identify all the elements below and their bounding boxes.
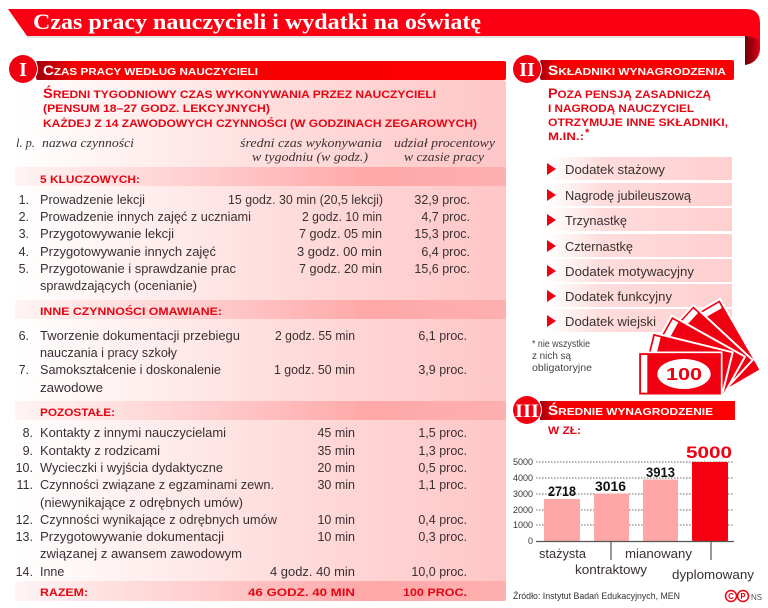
band: 5 kluczowych <box>15 167 506 186</box>
rows 8-14: 35 min <box>317 444 355 458</box>
rows 1-5: 4. <box>19 245 29 259</box>
rows 8-14: Przygotowywanie dokumentacji <box>40 530 224 544</box>
title: Czas pracy nauczycieli i wydatki na oświatę <box>33 9 481 34</box>
rows 8-14: 1,1 proc. <box>418 478 467 492</box>
bar chart: average salary: 4000 <box>513 473 533 483</box>
rows 1-5: 15,3 proc. <box>414 227 470 241</box>
table column headers: nazwa czynności <box>42 136 135 150</box>
rows 1-5: 32,9 proc. <box>414 193 470 207</box>
list of pay components: Dodatek wiejski <box>565 315 656 329</box>
rows 6-7: 3,9 proc. <box>418 363 467 377</box>
rows 8-14: 12. <box>16 513 33 527</box>
section header I: CZAS PRACY WEDŁUG NAUCZYCIELI <box>43 63 258 78</box>
credit icons: P <box>740 592 746 601</box>
subheading II: M.IN.: <box>548 131 584 143</box>
rows 6-7: 6. <box>19 329 29 343</box>
band: inne czynności omawiane <box>15 300 506 319</box>
rows 6-7: zawodowe <box>40 381 103 395</box>
table column headers: w czasie pracy <box>404 150 484 164</box>
table column headers <box>16 136 495 164</box>
rows 1-5: 3 godz. 00 min <box>297 245 382 259</box>
bar chart: average salary: 3913 <box>646 465 675 480</box>
rows 1-5: Przygotowanie i sprawdzanie prac <box>40 262 236 276</box>
panel subheading: KAŻDEJ Z 14 ZAWODOWYCH CZYNNOŚCI (W GODZINACH ZEGAROWYCH) <box>43 117 477 130</box>
rows 8-14: 8. <box>23 426 33 440</box>
rows 1-5: sprawdzających (ocenianie) <box>40 279 197 293</box>
list of pay components: Dodatek motywacyjny <box>565 265 695 279</box>
rows 6-7 <box>19 329 467 395</box>
band: razem: RAZEM: <box>40 587 88 599</box>
chart unit label: W ZŁ: <box>548 425 581 437</box>
band: razem: 100 PROC. <box>403 587 467 599</box>
panel subheading: (PENSUM 18–27 GODZ. LEKCYJNYCH) <box>43 103 270 115</box>
bar chart: average salary: kontraktowy <box>575 563 648 577</box>
footnote <box>532 339 592 374</box>
rows 6-7: 7. <box>19 363 29 377</box>
rows 8-14: 1,3 proc. <box>418 444 467 458</box>
footnote: z nich są <box>532 351 571 362</box>
icon: banknotes <box>638 299 761 395</box>
list of pay components <box>547 157 732 332</box>
rows 8-14: Kontakty z rodzicami <box>40 444 160 458</box>
rows 8-14: Kontakty z innymi nauczycielami <box>40 426 226 440</box>
rows 6-7: Samokształcenie i doskonalenie <box>40 363 221 377</box>
subheading II: POZA PENSJĄ ZASADNICZĄ <box>548 86 711 101</box>
rows 8-14: 13. <box>16 530 33 544</box>
rows 6-7: 1 godz. 50 min <box>274 363 355 377</box>
rows 8-14: 11. <box>17 478 33 492</box>
subheading II: OTRZYMUJE INNE SKŁADNIKI, <box>548 117 728 129</box>
rows 8-14: Wycieczki i wyjścia dydaktyczne <box>40 461 223 475</box>
rows 8-14: Czynności związane z egzaminami zewn. <box>40 478 274 492</box>
bar chart: average salary: 5000 <box>686 443 732 462</box>
rows 8-14: 45 min <box>317 426 355 440</box>
footnote: obligatoryjne <box>532 363 592 374</box>
table column headers: w tygodniu (w godz.) <box>252 150 368 164</box>
bar chart: average salary: dyplomowany <box>672 568 755 582</box>
rows 1-5: 6,4 proc. <box>421 245 470 259</box>
list of pay components: Dodatek funkcyjny <box>565 290 673 304</box>
bar chart: average salary: 2718 <box>548 484 576 499</box>
panel: czas pracy według nauczycieli <box>8 54 506 601</box>
bar chart: average salary: 5000 <box>513 457 533 467</box>
band: pozostałe <box>15 401 506 420</box>
section header II: SKŁADNIKI WYNAGRODZENIA <box>548 63 726 78</box>
section header II <box>512 54 734 84</box>
bar chart: average salary <box>513 443 755 582</box>
rows 1-5: Przygotowywanie innych zajęć <box>40 245 216 259</box>
bar chart: average salary: 0 <box>528 536 533 546</box>
table column headers: średni czas wykonywania <box>240 136 382 150</box>
subheading II <box>548 86 728 143</box>
rows 1-5 <box>19 193 470 293</box>
rows 8-14 <box>16 426 467 579</box>
footnote: * nie wszystkie <box>532 339 590 350</box>
band: 5 kluczowych: 5 KLUCZOWYCH: <box>40 174 140 186</box>
rows 1-5: 15,6 proc. <box>414 262 470 276</box>
rows 8-14: 10 min <box>317 530 355 544</box>
rows 8-14: 10,0 proc. <box>411 565 467 579</box>
list of pay components: Trzynastkę <box>565 214 627 228</box>
panel subheading <box>43 86 477 130</box>
rows 1-5: 7 godz. 20 min <box>299 262 382 276</box>
rows 8-14: Czynności wynikające z odrębnych umów <box>40 513 278 527</box>
panel subheading: ŚREDNI TYGODNIOWY CZAS WYKONYWANIA PRZEZ NAUCZYCIELI <box>43 86 436 101</box>
list of pay components: Czternastkę <box>565 240 633 254</box>
rows 1-5: Przygotowywanie lekcji <box>40 227 174 241</box>
bar chart: average salary: stażysta <box>539 547 586 561</box>
rows 8-14: 30 min <box>317 478 355 492</box>
list of pay components: Nagrodę jubileuszową <box>565 189 691 203</box>
bar chart: average salary: mianowany <box>625 547 693 561</box>
table column headers: udział procentowy <box>394 136 495 150</box>
rows 8-14: 20 min <box>317 461 355 475</box>
rows 1-5: 5. <box>19 262 29 276</box>
rows 1-5: 2. <box>19 210 29 224</box>
section header III: III <box>515 401 539 422</box>
rows 8-14: 9. <box>23 444 33 458</box>
title banner <box>8 9 760 65</box>
rows 8-14: 0,3 proc. <box>418 530 467 544</box>
subheading II: I NAGRODĄ NAUCZYCIEL <box>548 103 694 115</box>
rows 1-5: Prowadzenie innych zajęć z uczniami <box>40 210 251 224</box>
source: Źródło: Instytut Badań Edukacyjnych, MEN <box>513 591 680 602</box>
rows 1-5: 7 godz. 05 min <box>299 227 382 241</box>
rows 6-7: 6,1 proc. <box>418 329 467 343</box>
rows 1-5: 3. <box>19 227 29 241</box>
icon: banknotes: 100 <box>666 364 702 384</box>
bar chart: average salary: 1000 <box>513 520 533 530</box>
section header II: II <box>519 59 535 81</box>
rows 8-14: 0,4 proc. <box>418 513 467 527</box>
rows 8-14: 0,5 proc. <box>418 461 467 475</box>
bar chart: average salary: 2000 <box>513 505 533 515</box>
band: inne czynności omawiane: INNE CZYNNOŚCI OMAWIANE: <box>40 305 222 318</box>
table column headers: l. p. <box>16 136 35 150</box>
rows 8-14: 4 godz. 40 min <box>270 565 355 579</box>
section header III: ŚREDNIE WYNAGRODZENIE <box>548 403 713 418</box>
bar chart: average salary: 3000 <box>513 489 533 499</box>
rows 1-5: 2 godz. 10 min <box>302 210 382 224</box>
credit icons: NS <box>751 593 762 602</box>
rows 8-14: 14. <box>16 565 33 579</box>
rows 8-14: 1,5 proc. <box>418 426 467 440</box>
rows 1-5: Prowadzenie lekcji <box>40 193 145 207</box>
credit icons: C <box>728 592 734 601</box>
band: razem <box>15 581 506 601</box>
rows 8-14: 10. <box>16 461 33 475</box>
list of pay components: Dodatek stażowy <box>565 163 666 177</box>
section header I: I <box>19 59 27 81</box>
section header III <box>512 395 735 425</box>
rows 8-14: (niewynikające z odrębnych umów) <box>40 496 243 510</box>
band: razem: 46 GODZ. 40 MIN <box>248 587 355 599</box>
rows 6-7: nauczania i pracy szkoły <box>40 346 178 360</box>
rows 1-5: 15 godz. 30 min (20,5 lekcji) <box>228 193 383 207</box>
rows 1-5: 1. <box>19 193 29 207</box>
credit icons <box>726 590 762 602</box>
rows 8-14: związanej z awansem zawodowym <box>40 547 242 561</box>
rows 8-14: 10 min <box>317 513 355 527</box>
rows 1-5: 4,7 proc. <box>421 210 470 224</box>
subheading II: * <box>585 127 590 139</box>
bar chart: average salary: 3016 <box>595 479 626 494</box>
band: pozostałe: POZOSTAŁE: <box>40 407 115 419</box>
rows 8-14: Inne <box>40 565 64 579</box>
rows 6-7: Tworzenie dokumentacji przebiegu <box>40 329 240 343</box>
rows 6-7: 2 godz. 55 min <box>275 329 355 343</box>
section header I <box>8 54 506 84</box>
